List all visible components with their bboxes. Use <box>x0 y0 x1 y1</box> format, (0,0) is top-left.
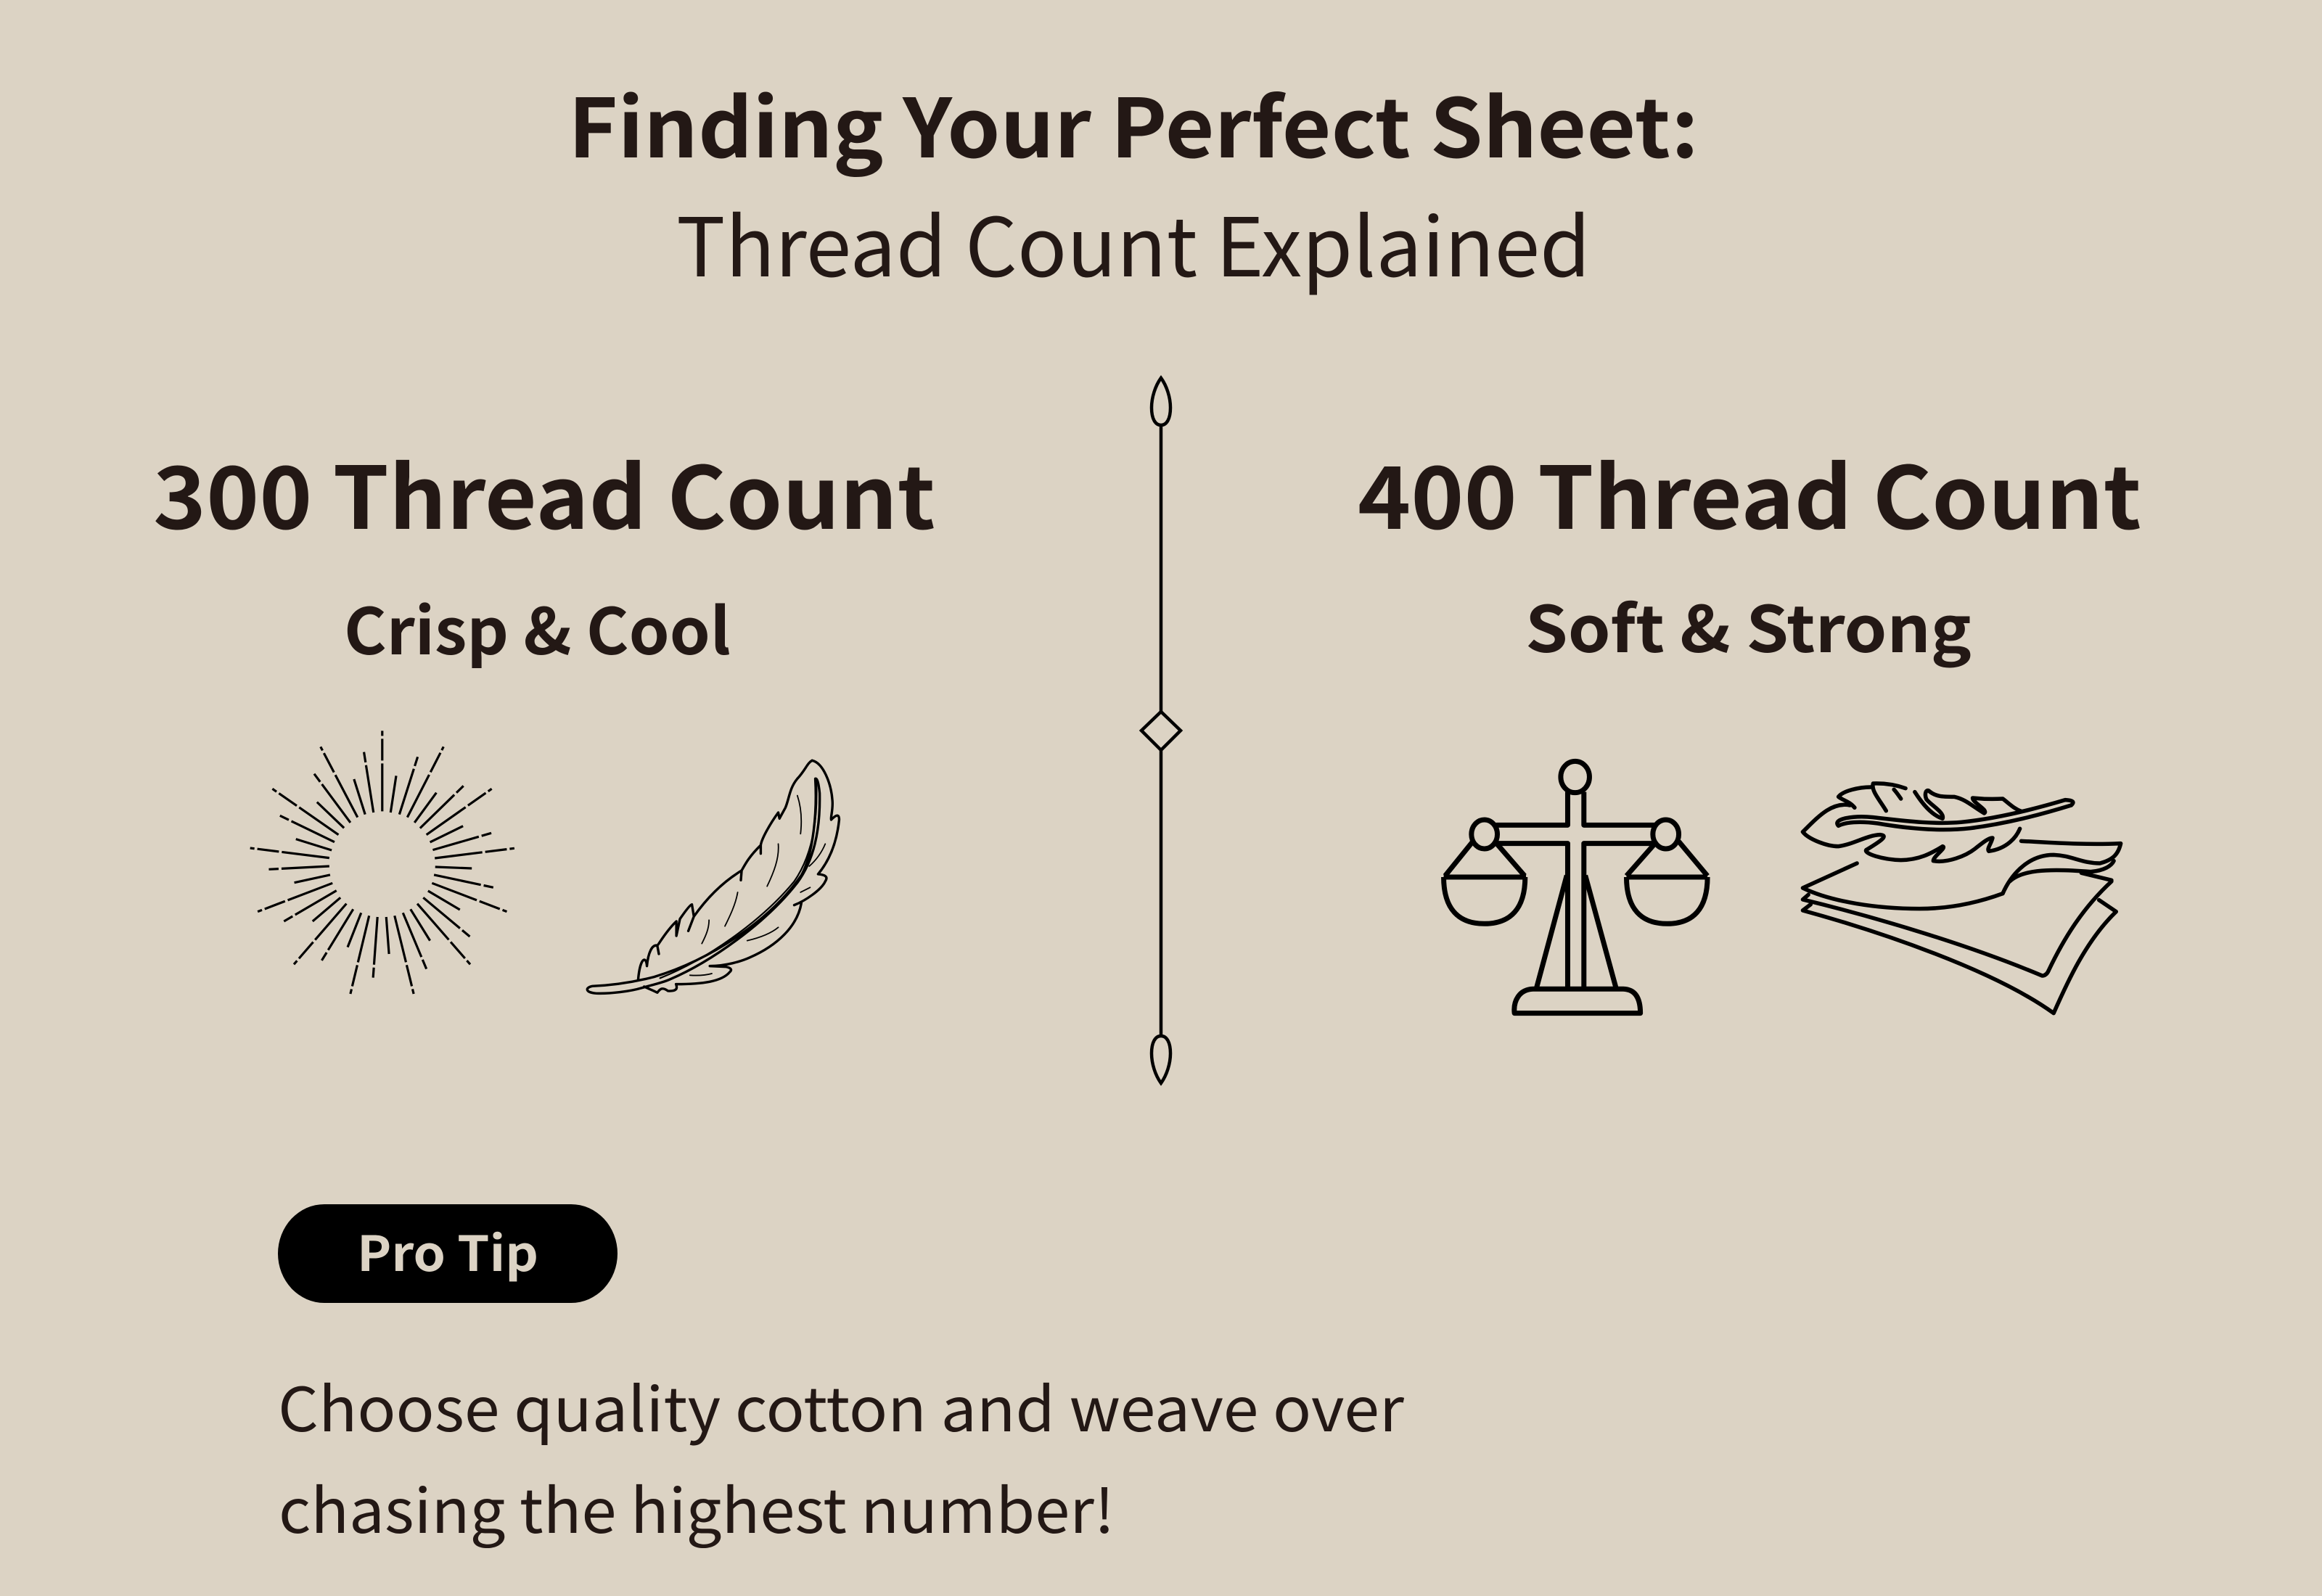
heading: 300 Thread Count: 300 Thread Count <box>153 429 935 554</box>
icon: feather <box>587 760 839 993</box>
text: pro tip advice: Choose quality cotton and weave over <box>278 1362 1404 1449</box>
divider ornament <box>1141 378 1181 1083</box>
heading: 400 Thread Count: 400 Thread Count <box>1358 429 2141 554</box>
title: Thread Count Explained <box>676 183 1591 300</box>
icon: balance scale <box>1444 761 1707 1013</box>
title: Finding Your Perfect Sheet: <box>568 64 1699 181</box>
icon: feather on stacked sheets <box>1802 783 2121 1013</box>
subheading: Soft & Strong: Soft & Strong <box>1525 579 1972 671</box>
panel: 300 thread count <box>153 429 935 994</box>
callout: pro tip <box>278 1204 1418 1551</box>
title <box>568 64 1699 300</box>
subheading: Crisp & Cool: Crisp & Cool <box>344 581 731 673</box>
panel: 400 thread count <box>1358 429 2141 1013</box>
badge: Pro Tip: Pro Tip <box>357 1215 538 1286</box>
icon: sun rays <box>250 731 514 994</box>
badge: Pro Tip <box>278 1204 618 1303</box>
text: pro tip advice: chasing the highest number! <box>279 1463 1115 1551</box>
